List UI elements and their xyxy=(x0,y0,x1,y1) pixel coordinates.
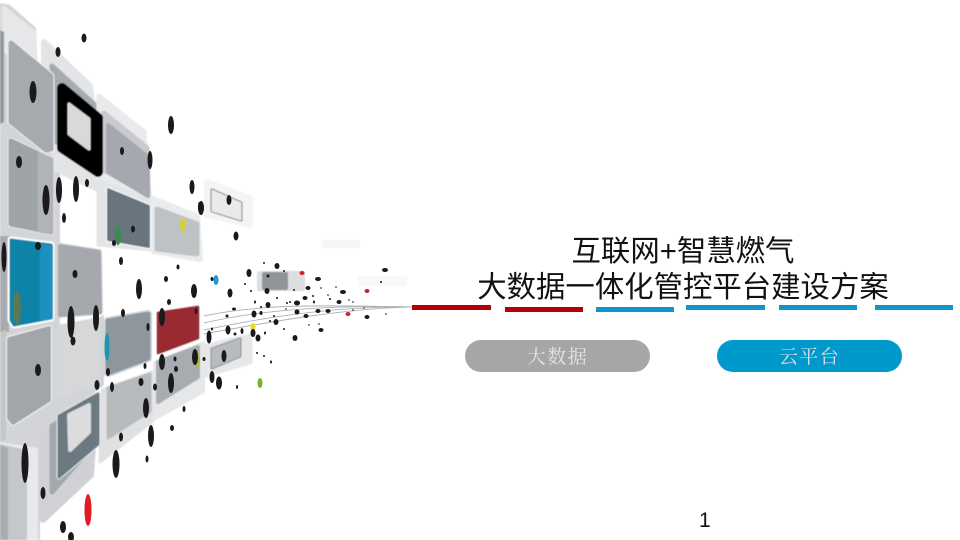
pill: cloud platform xyxy=(717,340,902,372)
title xyxy=(477,235,889,304)
black particles xyxy=(2,34,388,540)
red tile xyxy=(158,307,198,353)
bar: red 1 xyxy=(412,305,491,310)
black tile xyxy=(62,88,98,172)
small outlined tile xyxy=(207,182,250,225)
bar: blue 4 xyxy=(875,305,953,310)
title: 大数据一体化管控平台建设方案 xyxy=(477,271,889,304)
pill: cloud platform: 云平台 xyxy=(779,347,840,368)
title: 互联网+智慧燃气 xyxy=(572,235,794,268)
grey frame tile xyxy=(43,394,98,520)
small grey tile xyxy=(206,336,250,375)
bar: blue 1 xyxy=(596,307,674,312)
bar: red 2 xyxy=(505,307,583,312)
tile panels xyxy=(0,3,407,540)
coloured dots xyxy=(13,218,370,526)
divider bars xyxy=(412,305,953,312)
pill: big data xyxy=(465,340,650,372)
pill: big data: 大数据 xyxy=(527,347,588,368)
bar: blue 3 xyxy=(779,305,857,310)
blue tile xyxy=(11,240,53,325)
distant tile xyxy=(257,271,305,291)
bar: blue 2 xyxy=(686,305,765,310)
speed lines xyxy=(204,306,412,334)
page number: 1 xyxy=(699,509,711,532)
